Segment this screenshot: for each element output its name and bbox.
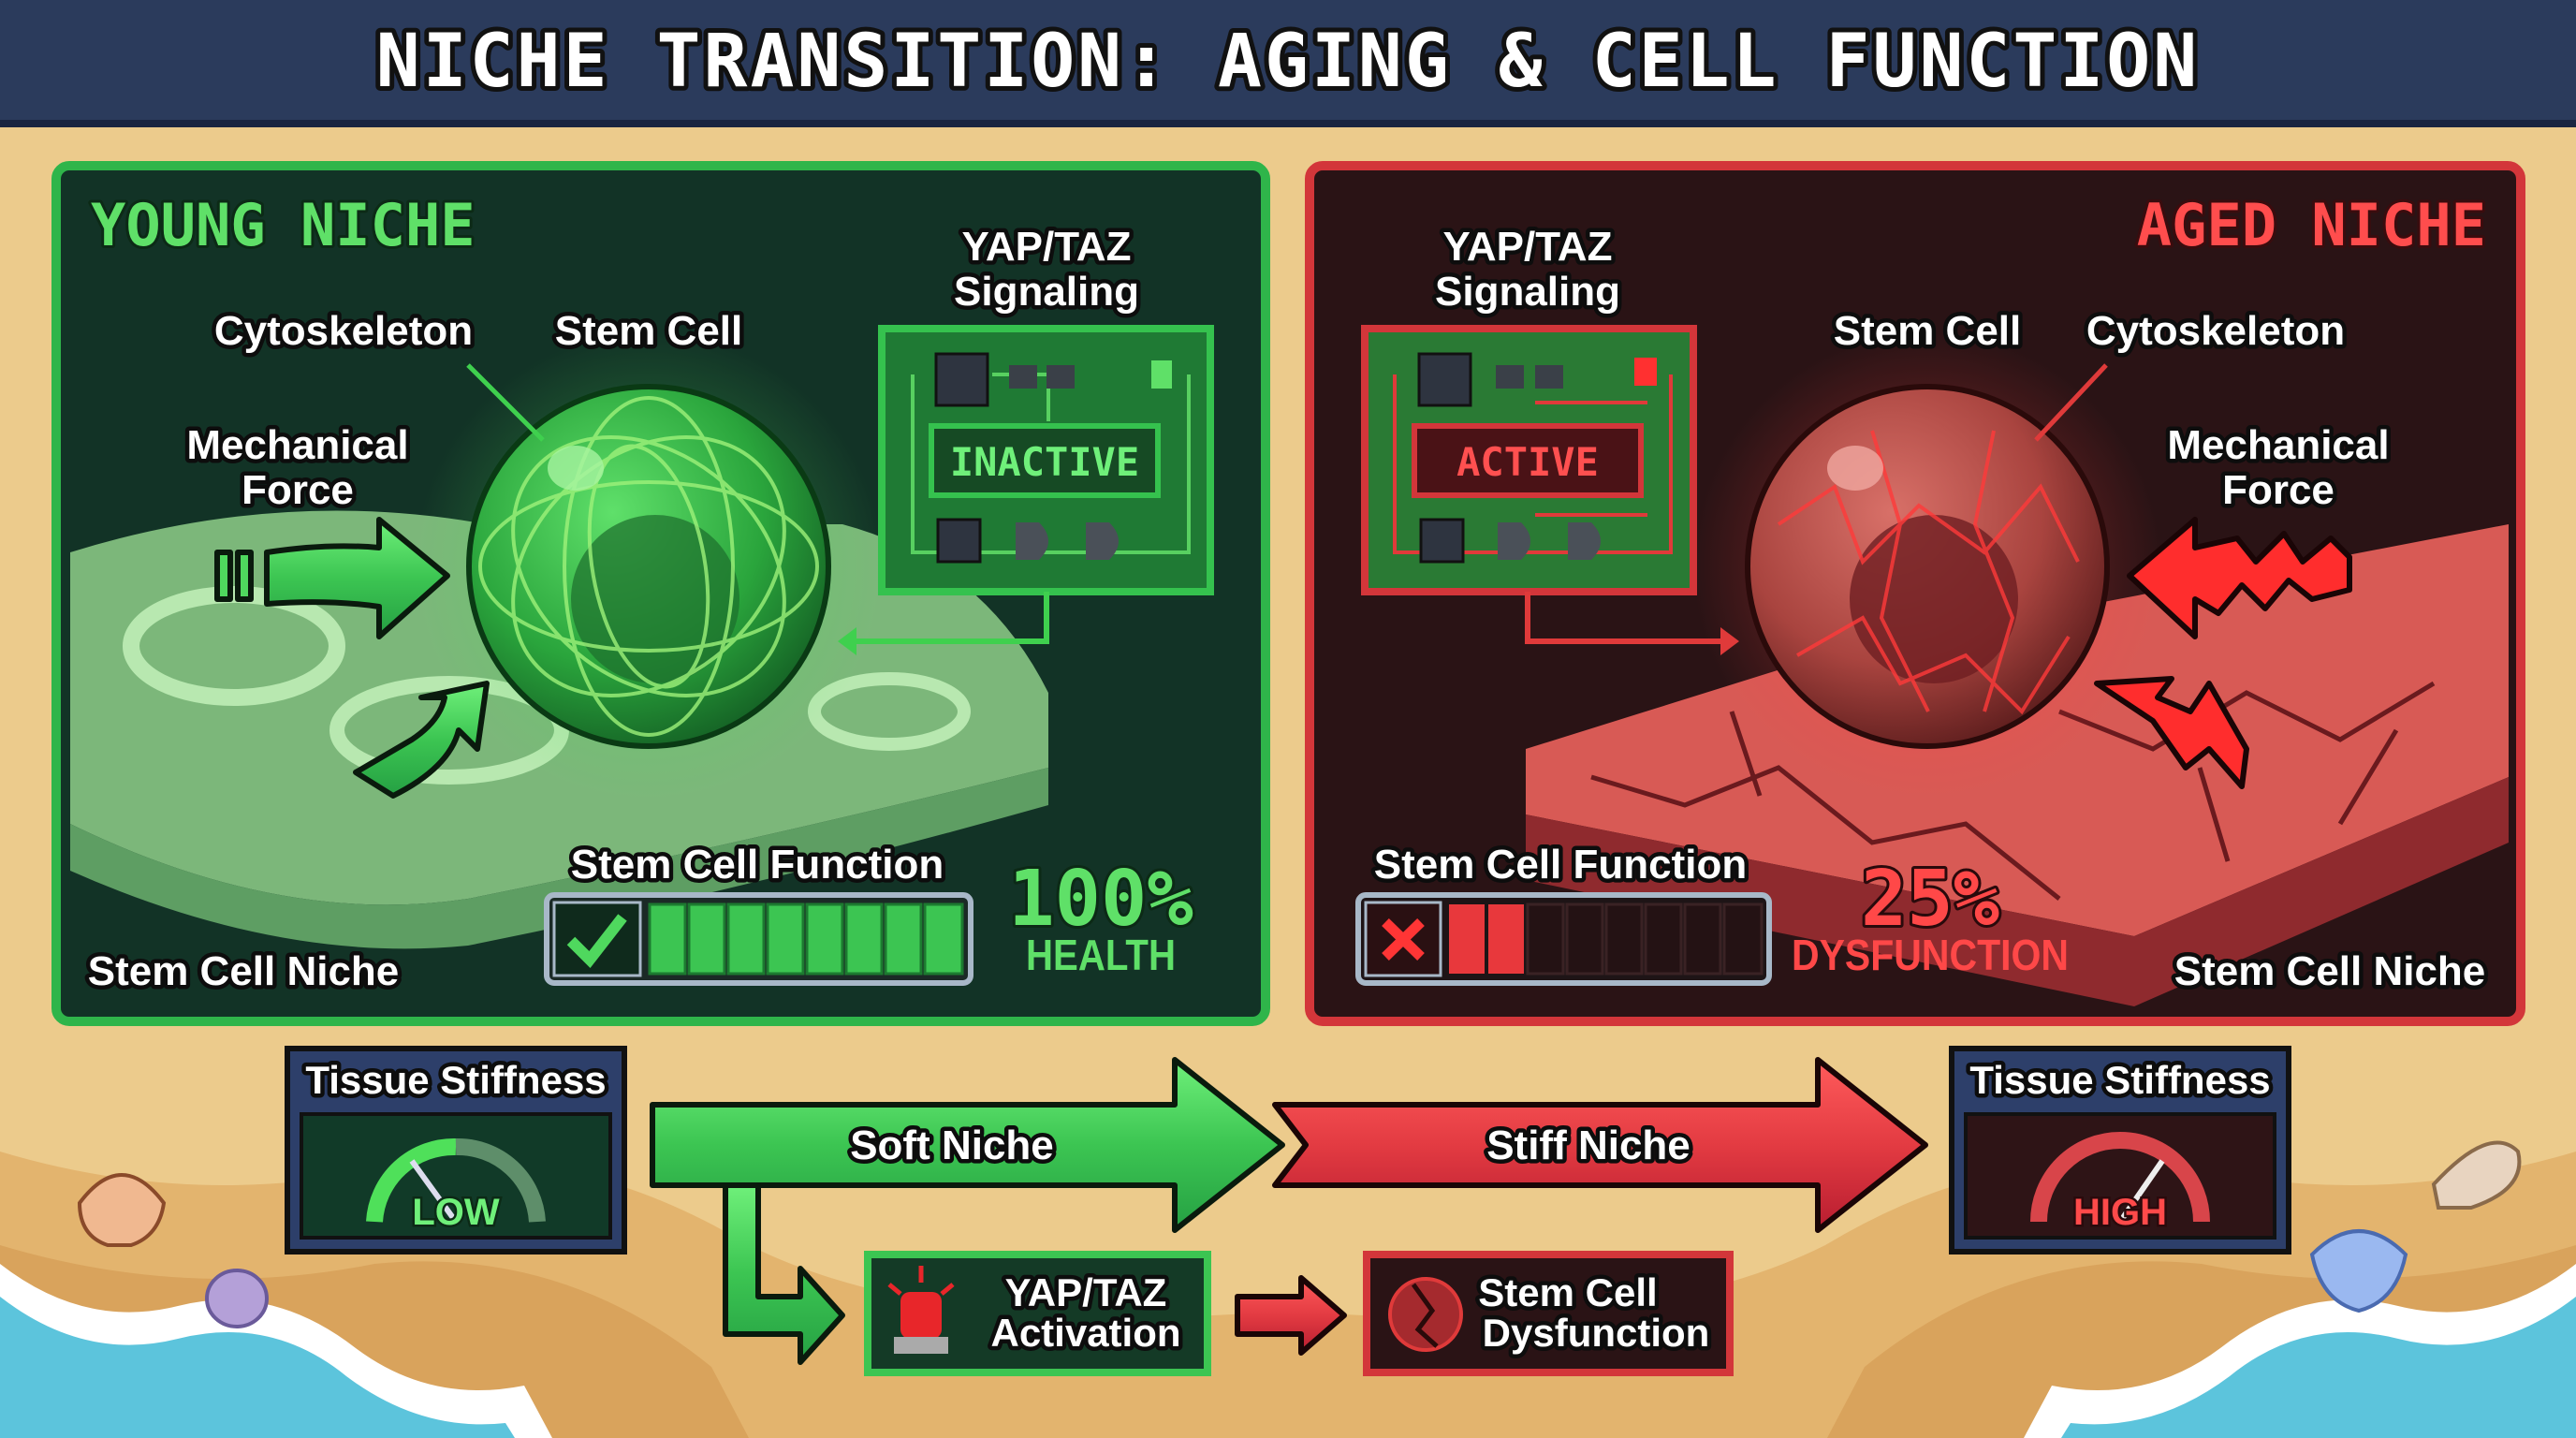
icon: broken cell <box>1390 1279 1461 1350</box>
box: stem cell dysfunction <box>1367 1255 1730 1372</box>
gauge: tissue stiffness low: LOW <box>412 1192 500 1233</box>
gauge: tissue stiffness high: HIGH <box>2073 1192 2167 1233</box>
label: mechanical force: Force <box>242 467 354 513</box>
label: mechanical force aged: Force <box>2222 467 2334 513</box>
stat: 25% dysfunction <box>1792 855 2069 979</box>
stat: 25% dysfunction: 25% <box>1861 855 1999 944</box>
icon: shell right <box>2434 1143 2519 1208</box>
status: inactive <box>931 426 1158 495</box>
platform: soft niche <box>70 510 1048 948</box>
title bar: NICHE TRANSITION: AGING & CELL FUNCTION <box>376 20 2200 104</box>
label: stem cell function: Stem Cell Function <box>571 842 944 888</box>
icon: aged stem cell <box>1693 332 2161 800</box>
arrow: signal to aged cell <box>1528 592 1727 641</box>
gauge: tissue stiffness low: Tissue Stiffness <box>305 1058 607 1102</box>
label: yap/taz signaling aged: YAP/TAZ <box>1443 224 1612 270</box>
heading: young niche: YOUNG NICHE <box>91 191 476 259</box>
label: cytoskeleton aged: Cytoskeleton <box>2086 308 2345 354</box>
stat: 25% dysfunction: DYSFUNCTION <box>1792 931 2069 979</box>
title bar <box>0 0 2576 127</box>
label: stem cell: Stem Cell <box>555 308 742 354</box>
label: cytoskeleton: Cytoskeleton <box>214 308 473 354</box>
panel: young niche <box>56 166 1266 1021</box>
label: stem cell function aged: Stem Cell Function <box>1374 842 1747 888</box>
gauge: tissue stiffness high: Tissue Stiffness <box>1969 1058 2271 1102</box>
icon: alarm light <box>889 1266 953 1354</box>
box: stem cell dysfunction: Stem Cell <box>1478 1270 1658 1314</box>
label: mechanical force: Mechanical <box>186 422 409 468</box>
label: cytoskeleton <box>214 308 543 440</box>
label: yap/taz signaling aged: Signaling <box>1435 269 1620 315</box>
label: mechanical force aged: Mechanical <box>2167 422 2390 468</box>
arrow: mechanical force up <box>356 683 487 796</box>
status: active: ACTIVE <box>1456 439 1599 485</box>
box: yap/taz activation: Activation <box>990 1311 1181 1355</box>
arrow: soft niche: Soft Niche <box>850 1123 1054 1168</box>
arrow: stiff niche: Stiff Niche <box>1486 1123 1690 1168</box>
circuit: inactive <box>882 329 1210 592</box>
panel: aged niche <box>1310 166 2521 1021</box>
waves right <box>2024 1264 2576 1438</box>
icon: shell left <box>80 1175 164 1245</box>
stat: 100% health: 100% <box>1008 855 1193 944</box>
arrow: soft niche <box>652 1060 1282 1230</box>
circuit: active <box>1365 329 1693 592</box>
label: stem cell niche young: Stem Cell Niche <box>88 948 399 994</box>
icon: blue shell <box>2312 1231 2406 1311</box>
arrow: stiff niche <box>1275 1060 1925 1230</box>
gauge: tissue stiffness high <box>1952 1049 2289 1252</box>
arrow: branch down to activation <box>725 1185 842 1362</box>
arrow: signal to cell <box>842 592 1046 641</box>
status: active <box>1414 426 1641 495</box>
arrow: activation to dysfunction <box>1237 1278 1344 1353</box>
icon: pebble purple <box>207 1270 267 1327</box>
box: yap/taz activation <box>868 1255 1208 1372</box>
arrow: jagged force left <box>2130 520 2349 637</box>
icon: young stem cell <box>415 332 883 800</box>
bar: function 25% <box>1358 895 1769 983</box>
label: stem cell aged: Stem Cell <box>1834 308 2021 354</box>
label: cytoskeleton aged <box>2036 308 2345 440</box>
box: yap/taz activation: YAP/TAZ <box>1005 1270 1166 1314</box>
platform: stiff cracked niche <box>1526 524 2509 1006</box>
arrow: mechanical force right <box>217 520 447 637</box>
stat: 100% health: HEALTH <box>1026 931 1176 979</box>
gauge: tissue stiffness low <box>287 1049 624 1252</box>
arrow: force up-left <box>2097 679 2247 786</box>
status: inactive: INACTIVE <box>950 439 1139 485</box>
label: stem cell niche aged: Stem Cell Niche <box>2174 948 2485 994</box>
bar: health 100% <box>547 895 971 983</box>
box: stem cell dysfunction: Dysfunction <box>1483 1311 1709 1355</box>
waves left <box>0 1264 552 1438</box>
label: yap/taz signaling: Signaling <box>954 269 1139 315</box>
heading: aged niche: AGED NICHE <box>2137 191 2486 259</box>
label: yap/taz signaling: YAP/TAZ <box>962 224 1131 270</box>
